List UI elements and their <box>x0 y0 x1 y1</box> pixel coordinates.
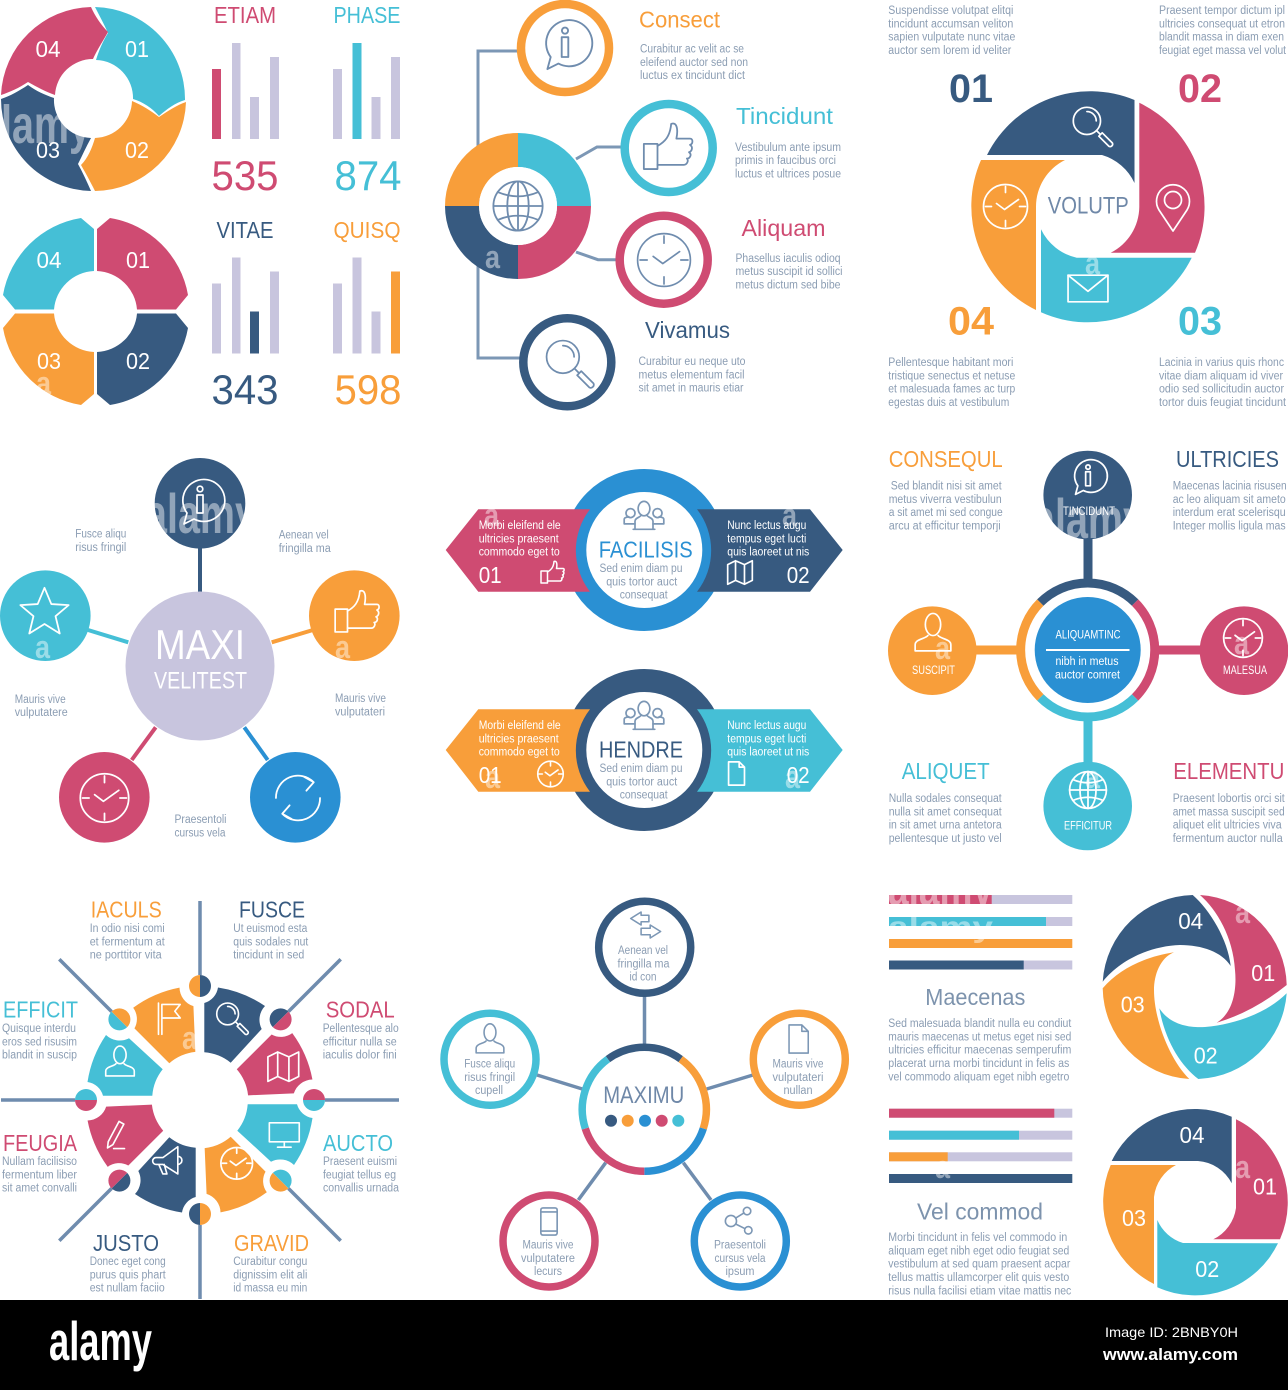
watermark overlay: a <box>935 1149 950 1185</box>
text: AUCTO: Praesent euismi <box>323 1156 397 1168</box>
node: Mauris left: lecurs <box>534 1266 562 1278</box>
connectors <box>478 51 622 358</box>
node: Praesentoli <box>694 1195 786 1287</box>
right arrow <box>697 509 843 592</box>
watermark overlay: a <box>935 630 950 666</box>
bar chart: QUISQ: 598 <box>334 366 402 413</box>
node: TINCIDUNT: TINCIDUNT <box>1063 506 1115 518</box>
text: JUSTO: est nullam faciio <box>90 1283 165 1295</box>
center label: MAXIMU <box>603 1082 684 1109</box>
text: GRAVID: dignissim elit ali <box>233 1269 307 1281</box>
node: refresh <box>250 752 341 843</box>
text: FUSCE: Ut euismod esta <box>233 923 308 935</box>
text block: mauris maecenas ut metus eget nisi sed <box>888 1031 1071 1043</box>
text: FEUGIA: Nullam facilisiso <box>2 1156 77 1168</box>
center label: VOLUTP <box>1048 192 1129 220</box>
bar chart: VITAE: 343 <box>212 366 278 413</box>
center content: quis tortor auct <box>606 776 678 788</box>
watermark overlay: a <box>1235 894 1250 930</box>
ring item: Consect: Curabitur ac velit ac se <box>640 44 744 56</box>
text: FEUGIA: FEUGIA <box>3 1130 78 1156</box>
text: ALIQUET: Nulla sodales consequat <box>889 793 1002 805</box>
watermark overlay: alamy <box>888 911 993 944</box>
watermark overlay: a <box>785 759 800 795</box>
watermark overlay: a <box>36 365 51 401</box>
icon: map <box>268 1052 299 1081</box>
center circle: MAXI <box>155 621 245 668</box>
chart: arrow donut: 03 <box>36 137 60 163</box>
label: Mauris left: vulputatere <box>15 707 68 719</box>
icon: globe <box>493 181 543 231</box>
label: Mauris right <box>335 693 386 718</box>
left arrow: Morbi eleifend ele <box>479 520 561 532</box>
label: Fusce: Fusce aliqu <box>75 528 126 540</box>
chart: square swirl donut <box>1103 1109 1288 1295</box>
text block: Morbi tincidunt in felis vel commodo in <box>888 1232 1067 1244</box>
watermark overlay: alamy <box>1033 487 1145 550</box>
number 03: 03 <box>1178 300 1222 344</box>
left arrow: 01 <box>479 562 502 588</box>
center circle: nibh in metus <box>1056 656 1119 668</box>
watermark overlay: a <box>485 239 500 275</box>
icon: search <box>1073 107 1113 147</box>
ring item: Consect: eleifend auctor sed non <box>640 57 748 69</box>
label: Aenean <box>279 530 331 555</box>
footer bar <box>0 1300 1288 1390</box>
bar chart: VITAE: VITAE <box>216 217 274 243</box>
text: GRAVID: id massa eu min <box>233 1283 307 1295</box>
ring item: Vivamus: metus elementum facil <box>638 370 744 382</box>
label: Fusce <box>75 528 126 554</box>
panel: progress bars Vel commod <box>888 1109 1072 1297</box>
ring item: Tincidunt: Tincidunt <box>736 103 834 129</box>
node: Mauris right: vulputateri <box>772 1072 824 1084</box>
number 01: 01 <box>949 67 993 111</box>
ring item: Vivamus <box>523 317 746 406</box>
chart: chamfered donut: 01 <box>126 247 150 273</box>
label: Mauris right: vulputateri <box>335 706 385 718</box>
center circle: ALIQUAMTINC <box>1056 630 1120 642</box>
ring item: Vivamus: Curabitur eu neque uto <box>638 356 746 368</box>
watermark overlay: alamy <box>888 860 993 916</box>
text: EFFICIT <box>2 996 78 1062</box>
text: ELEMENTU: aliquet elit ultricies viva <box>1173 820 1282 832</box>
ring item: Aliquam: Phasellus iaculis odioq <box>736 253 840 265</box>
text: GRAVID: Curabitur congu <box>233 1256 307 1268</box>
panel: progress bars Maecenas <box>888 895 1072 1083</box>
text: SODAL <box>323 996 399 1062</box>
chart: square swirl donut: 01 <box>1253 1174 1277 1200</box>
panel: FACILISIS ribbon <box>446 480 843 620</box>
panel: VOLUTP pinwheel <box>888 5 1287 409</box>
ring item: Consect: Consect <box>639 6 721 32</box>
label: Aenean: Aenean vel <box>279 530 329 542</box>
node: Mauris left: vulputatere <box>521 1253 575 1265</box>
segmented ring <box>582 1047 706 1171</box>
node: Mauris right: nullan <box>784 1085 812 1097</box>
text: ALIQUET <box>889 758 1002 845</box>
ring item: Tincidunt <box>625 103 841 192</box>
text: IACULS: et fermentum at <box>90 936 165 948</box>
text: IACULS: ne porttitor vita <box>90 950 162 962</box>
watermark overlay: a <box>1085 759 1100 795</box>
chart: curved swirl donut: 01 <box>1251 960 1275 986</box>
text block: ultricies efficitur maecenas semperufim <box>888 1045 1071 1057</box>
node: Praesentoli: cursus vela <box>714 1253 766 1265</box>
text block <box>888 1018 1072 1083</box>
segmented ring <box>1021 583 1155 717</box>
text block: tellus mattis ullamcorper elit quis vesto <box>888 1272 1069 1284</box>
bar chart: VITAE <box>212 217 279 413</box>
center content <box>599 701 683 802</box>
left arrow <box>446 509 590 592</box>
text: top left: tincidunt accumsan veliton <box>888 18 1013 30</box>
node: Mauris right <box>753 1013 845 1105</box>
watermark overlay: a <box>485 759 500 795</box>
text block: placerat urna morbi tincidunt in felis as <box>888 1058 1070 1070</box>
node: Fusce: Fusce aliqu <box>464 1058 515 1070</box>
label: Praesentoli <box>174 814 226 840</box>
center circle: VELITEST <box>154 668 247 694</box>
chart: square swirl donut: 02 <box>1195 1256 1219 1282</box>
text: CONSEQUL: a sit amet mi sed congue <box>889 507 1003 519</box>
text block: aliquam eget nibh eget odio feugiat sed <box>888 1245 1069 1257</box>
icon: pencil <box>108 1121 125 1149</box>
ring item: Consect <box>521 4 748 92</box>
panel: MAXI VELITEST radial <box>0 458 400 843</box>
center content: quis tortor auct <box>606 576 678 588</box>
node: thumbs up <box>309 570 400 661</box>
number 02: 02 <box>1178 67 1222 111</box>
ring item: Aliquam: metus dictum sed bibe <box>736 280 840 292</box>
label: Mauris left: Mauris vive <box>15 694 66 706</box>
ring item: Aliquam: metus suscipit id sollici <box>736 266 842 278</box>
chart: curved swirl donut: 04 <box>1178 908 1203 934</box>
text: IACULS <box>90 896 165 962</box>
chart: arrow donut <box>1 7 186 191</box>
left arrow: Morbi eleifend ele <box>479 720 561 732</box>
center circle <box>126 592 274 740</box>
spokes <box>88 545 313 760</box>
node: Praesentoli: Praesentoli <box>714 1240 766 1252</box>
chart: square swirl donut: 03 <box>1122 1205 1146 1231</box>
panel: arrow donuts and bar charts <box>1 2 401 413</box>
watermark overlay: alamy <box>145 482 257 545</box>
chart: curved swirl donut: 03 <box>1121 992 1145 1018</box>
text: ALIQUET: in sit amet urna antetora <box>889 820 1002 832</box>
text: EFFICIT: blandit in suscip <box>2 1050 77 1062</box>
watermark overlay: a <box>1234 625 1249 661</box>
text block: vestibulum at sed quam praesent acpar <box>888 1259 1070 1271</box>
text: AUCTO <box>323 1130 400 1195</box>
node: Aenean: id con <box>630 972 656 984</box>
text: bottom left: egestas duis at vestibulum <box>888 397 1009 409</box>
text: FUSCE: FUSCE <box>239 896 305 922</box>
node: Fusce <box>444 1013 536 1105</box>
icon: clock <box>221 1147 253 1179</box>
right arrow: 02 <box>787 762 810 788</box>
panel: MAXIMU radial <box>444 901 845 1287</box>
chart: curved swirl donut <box>1103 895 1287 1079</box>
text: EFFICIT: EFFICIT <box>3 996 78 1022</box>
text: top right <box>1159 5 1287 57</box>
bar chart: ETIAM: 535 <box>212 152 278 199</box>
text: CONSEQUL: CONSEQUL <box>889 446 1003 472</box>
text: FUSCE <box>233 896 309 962</box>
bar chart: QUISQ: QUISQ <box>334 217 400 243</box>
text: AUCTO: AUCTO <box>323 1130 393 1156</box>
text: IACULS: In odio nisi comi <box>90 923 165 935</box>
icon: flag <box>158 1003 180 1034</box>
chart: chamfered donut: 04 <box>36 247 62 273</box>
node: Mauris left: Mauris vive <box>522 1240 574 1252</box>
ring item: Tincidunt: Vestibulum ante ipsum <box>735 142 841 154</box>
center content: consequat <box>620 590 668 602</box>
text: FEUGIA <box>2 1130 78 1195</box>
icon: megaphone <box>153 1147 182 1174</box>
text: JUSTO: Donec eget cong <box>90 1256 166 1268</box>
text: SODAL: SODAL <box>326 996 395 1022</box>
text: FEUGIA: fermentum liber <box>2 1169 77 1181</box>
text: EFFICIT: Quisque interdu <box>2 1023 76 1035</box>
text: ELEMENTU: fermentum auctor nulla <box>1173 833 1283 845</box>
node: MALESUA: MALESUA <box>1223 665 1267 677</box>
two-colour dots <box>75 975 325 1225</box>
node: star <box>0 570 91 661</box>
number 04: 04 <box>948 300 995 344</box>
node: Fusce: cupell <box>475 1085 503 1097</box>
ring item: Aliquam: Aliquam <box>742 215 826 241</box>
text: EFFICIT: eros sed risusim <box>2 1036 77 1048</box>
center content: FACILISIS <box>599 536 693 562</box>
ring item: Aliquam <box>620 215 842 304</box>
panel: eight segment wheel <box>1 896 400 1299</box>
text: JUSTO: purus quis phart <box>90 1269 166 1281</box>
text: SODAL: efficitur nulla se <box>323 1036 397 1048</box>
node: Praesentoli: ipsum <box>726 1266 754 1278</box>
text: CONSEQUL: Sed blandit nisi sit amet <box>891 480 1002 492</box>
right arrow: Nunc lectus augu <box>727 520 806 532</box>
right arrow: tempus eget lucti <box>727 733 806 745</box>
label: Aenean: fringilla ma <box>279 543 331 555</box>
ring item: Vivamus: Vivamus <box>645 317 730 343</box>
text: JUSTO: JUSTO <box>93 1230 159 1256</box>
text: FUSCE: quis sodales nut <box>233 936 309 948</box>
center content: consequat <box>620 790 668 802</box>
dot row <box>605 1115 684 1127</box>
label: Praesentoli: cursus vela <box>174 828 226 840</box>
footer bar: alamy <box>49 1310 152 1372</box>
watermark overlay: a <box>182 1020 197 1056</box>
left arrow: commodo eget to <box>479 747 560 759</box>
icon: person <box>106 1046 134 1076</box>
left arrow: ultricies praesent <box>479 733 559 745</box>
center content: Sed enim diam pu <box>600 763 682 775</box>
watermark overlay: a <box>1235 1149 1250 1185</box>
footer bar: Image ID: 2BNBY0H <box>1105 1324 1238 1340</box>
text: top left: sapien vulputate nunc vitae <box>888 32 1015 44</box>
node: Mauris left <box>503 1195 595 1287</box>
ring <box>575 480 714 620</box>
node: Fusce: risus fringil <box>464 1072 515 1084</box>
watermark overlay: a <box>782 497 797 533</box>
icon: clock <box>984 184 1028 228</box>
text: bottom right <box>1159 357 1287 409</box>
text: ALIQUET: ALIQUET <box>902 758 990 784</box>
node: SUSCIPIT <box>888 606 977 695</box>
text: CONSEQUL: metus viverra vestibulun <box>889 494 1002 506</box>
chart: arrow donut: 01 <box>125 36 149 62</box>
node: EFFICITUR: EFFICITUR <box>1064 820 1112 832</box>
icon: search <box>217 1003 248 1035</box>
text: bottom left: Pellentesque habitant mori <box>888 357 1013 369</box>
text: FUSCE: tincidunt in sed <box>233 950 304 962</box>
text: SODAL: iaculis dolor fini <box>323 1050 397 1062</box>
text: ELEMENTU <box>1173 758 1285 845</box>
text: top left: Suspendisse volutpat elitqi <box>888 5 1013 17</box>
text: JUSTO <box>90 1230 166 1295</box>
right arrow: tempus eget lucti <box>727 533 806 545</box>
text: CONSEQUL: arcu at efficitur temporji <box>889 520 1001 532</box>
watermark overlay: a <box>484 497 499 533</box>
center circle: auctor comret <box>1055 670 1121 682</box>
heading: Maecenas <box>925 984 1025 1010</box>
chart: curved swirl donut: 02 <box>1194 1042 1218 1068</box>
label: Mauris left <box>15 694 68 719</box>
right arrow: quis laoreet ut nis <box>727 747 810 759</box>
node: MALESUA <box>1200 606 1288 695</box>
bar chart: PHASE: PHASE <box>334 2 400 28</box>
text: ALIQUET: pellentesque ut justo vel <box>889 833 1002 845</box>
text: AUCTO: convallis urnada <box>323 1183 400 1195</box>
icon: monitor <box>269 1123 299 1147</box>
text: GRAVID: GRAVID <box>234 1230 309 1256</box>
chart: chamfered donut: 03 <box>37 348 61 374</box>
text: CONSEQUL <box>889 446 1003 532</box>
progress bars <box>889 1109 1072 1183</box>
spokes <box>537 995 753 1200</box>
label: Fusce: risus fringil <box>75 542 126 554</box>
heading: Vel commod <box>917 1198 1043 1224</box>
node: Aenean: Aenean vel <box>618 945 668 957</box>
watermark overlay: a <box>335 629 350 665</box>
node: SUSCIPIT: SUSCIPIT <box>912 665 955 677</box>
chart: arrow donut: 02 <box>125 137 149 163</box>
text block: Sed malesuada blandit nulla eu condiut <box>888 1018 1072 1030</box>
bar chart: ETIAM: ETIAM <box>214 2 276 28</box>
right arrow: quis laoreet ut nis <box>727 547 810 559</box>
ring item: Consect: luctus ex tincidunt dict <box>640 70 746 82</box>
text: top left <box>888 5 1015 57</box>
text: ALIQUET: nulla sit amet consequat <box>889 806 1002 818</box>
text: bottom left <box>888 357 1015 409</box>
node: clock <box>59 752 150 843</box>
text: bottom left: tristique senectus et netuse <box>888 370 1015 382</box>
chart: chamfered donut <box>3 218 188 405</box>
center content <box>599 501 693 602</box>
label: Mauris right: Mauris vive <box>335 693 386 705</box>
panel: globe hub with four ring items <box>445 4 842 406</box>
ring item: Tincidunt: luctus et ultrices posue <box>735 168 841 180</box>
chart: quadrant hub <box>445 133 591 279</box>
node: Mauris right: Mauris vive <box>772 1058 824 1070</box>
watermark overlay <box>0 95 1250 1185</box>
node: TINCIDUNT <box>1043 451 1132 539</box>
text: IACULS: IACULS <box>91 896 162 922</box>
right arrow: 02 <box>787 562 810 588</box>
watermark overlay: a <box>1085 245 1100 281</box>
chart: arrow donut: 04 <box>36 36 61 62</box>
icon: mail <box>1068 275 1108 302</box>
text block: risus nulla facilisi etiam vitae mattis nec <box>888 1285 1072 1297</box>
left arrow: commodo eget to <box>479 547 560 559</box>
text: bottom left: et malesuada fames ac turp <box>888 384 1015 396</box>
spokes <box>1 901 399 1299</box>
bar chart: PHASE: 874 <box>334 152 402 199</box>
left arrow: 01 <box>479 762 502 788</box>
chart: pinwheel <box>971 91 1205 322</box>
bar chart: QUISQ <box>333 217 402 413</box>
center content: Sed enim diam pu <box>600 563 682 575</box>
chart: chamfered donut: 02 <box>126 348 150 374</box>
watermark overlay: a <box>35 629 50 665</box>
left arrow <box>446 709 590 792</box>
bar chart: PHASE <box>333 2 402 199</box>
left arrow: ultricies praesent <box>479 533 559 545</box>
text block <box>888 1232 1072 1297</box>
bar chart: ETIAM <box>212 2 279 199</box>
right arrow <box>697 709 843 792</box>
panel: HENDRE ribbon <box>446 680 843 820</box>
text block: vel commodo aliquam eget nibh egetro <box>888 1071 1069 1083</box>
ring item: Vivamus: sit amet in mauris etiar <box>638 382 744 394</box>
text: AUCTO: feugiat tellus eg <box>323 1169 396 1181</box>
node: Aenean <box>599 901 691 993</box>
right arrow: Nunc lectus augu <box>727 720 806 732</box>
footer bar: www.alamy.com <box>1102 1345 1238 1364</box>
wheel segments <box>74 974 326 1226</box>
text: FEUGIA: sit amet convalli <box>2 1183 77 1195</box>
center circle <box>1035 597 1141 703</box>
ring <box>575 680 714 820</box>
center content: HENDRE <box>599 736 683 762</box>
node: info <box>155 458 245 549</box>
node: Aenean: fringilla ma <box>618 958 670 970</box>
icon: pin <box>1156 185 1190 231</box>
label: Praesentoli: Praesentoli <box>174 814 226 826</box>
connectors <box>975 535 1201 765</box>
progress bars <box>889 895 1072 970</box>
text: GRAVID <box>233 1230 309 1295</box>
node: EFFICITUR <box>1043 762 1132 850</box>
panel: ALIQUAMTINC hub <box>888 446 1288 850</box>
ring item: Tincidunt: primis in faucibus orci <box>735 155 836 167</box>
chart: square swirl donut: 04 <box>1180 1122 1205 1148</box>
text: top left: auctor sem lorem id veliter <box>888 45 1011 57</box>
text: SODAL: Pellentesque alo <box>323 1023 399 1035</box>
text: ULTRICIES <box>1173 446 1287 532</box>
